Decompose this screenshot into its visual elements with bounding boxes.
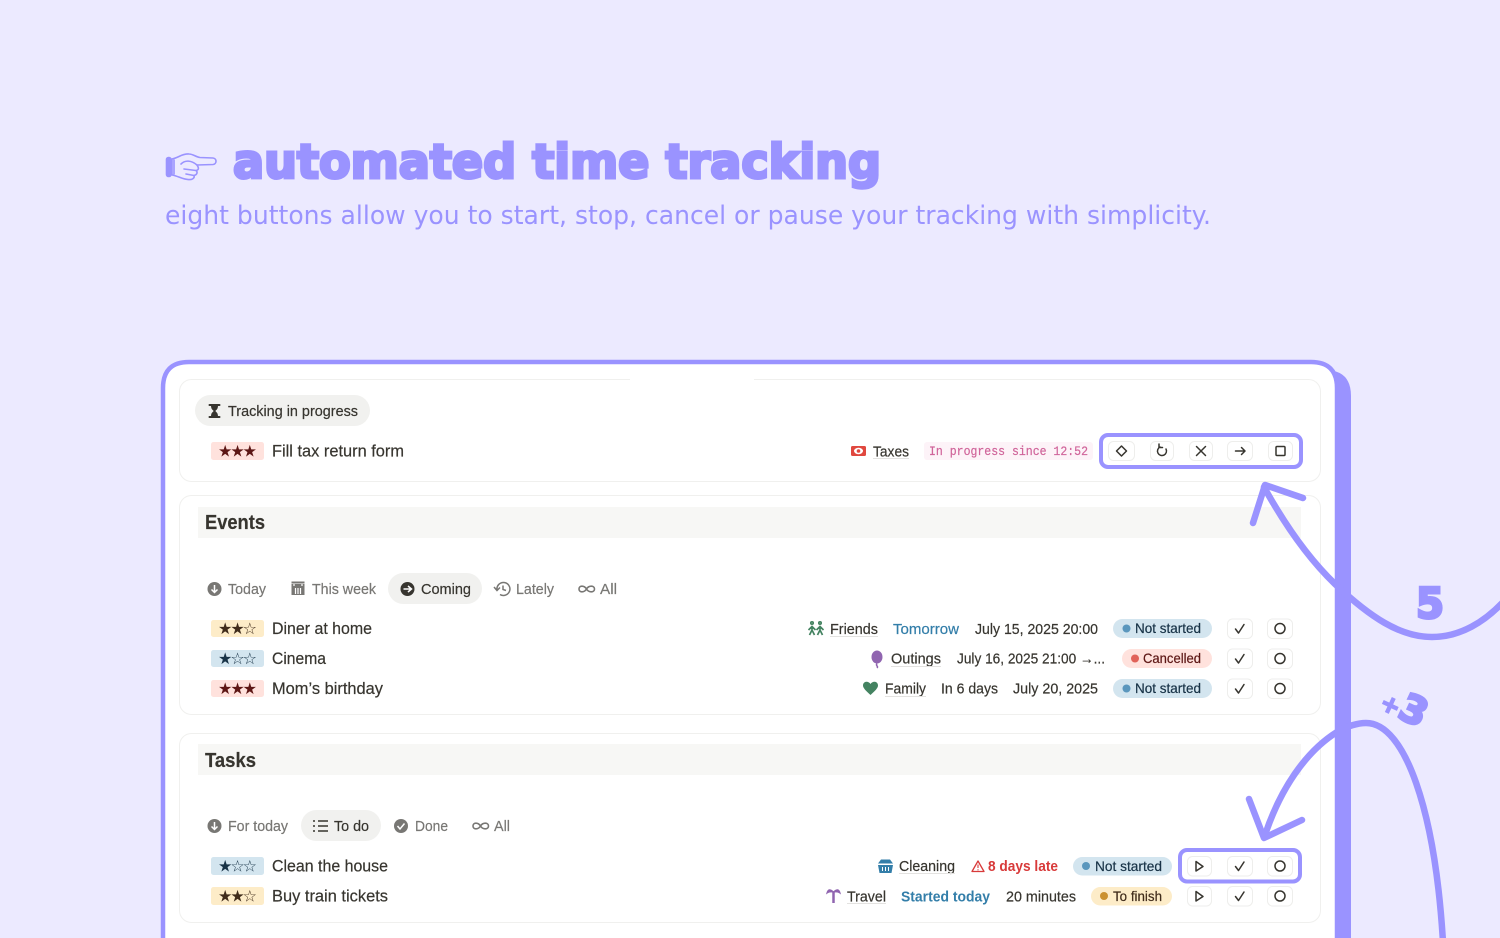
row: buy train tickets: 20 minutes [1006,888,1076,906]
heading: tasks: Tasks [205,750,256,772]
row: clean the house: Clean the house [272,858,388,876]
row: buy train tickets: Buy train tickets [272,888,388,906]
buttons: five tracking actions [1108,442,1292,460]
row: clean the house [211,856,1172,876]
row: fill tax return form: In progress since 12:52 [929,445,1088,459]
tabs: events views: Coming [421,581,471,598]
row: cinema: Cinema [272,650,327,668]
tabs: events views: Lately [516,581,554,598]
tabs: tasks views: To do [334,818,369,835]
row: diner at home: Tomorrow [893,621,959,638]
row: clean the house: Cleaning [899,858,955,875]
panel: events [180,496,1320,714]
tabs: events views: All [600,581,617,598]
row: diner at home: July 15, 2025 20:00 [975,621,1098,638]
tab: tracking in progress [195,395,370,426]
heading: events [198,507,1301,538]
row: mom's birthday: Family [885,680,926,698]
row: diner at home: Friends [830,621,878,638]
row: fill tax return form [211,442,1093,460]
row: buy train tickets [211,886,1172,906]
panel: tasks [180,734,1320,922]
row: mom's birthday: Not started [1135,680,1201,696]
row: fill tax return form: ★★★ [218,442,257,460]
icon: pointing hand [166,154,216,180]
row: cinema: July 16, 2025 21:00 →... [957,650,1105,668]
row: mom's birthday: In 6 days [941,680,998,698]
row: diner at home [211,619,1212,638]
heading: events: Events [205,512,265,534]
tabs: tasks views: Done [415,818,448,835]
row: mom's birthday: ★★★ [218,679,257,698]
row: fill tax return form: Taxes [873,444,909,460]
tabs: tasks views [208,810,510,841]
tabs: events views: Today [228,581,266,598]
row: clean the house: Not started [1095,858,1162,874]
row: clean the house: ★☆☆ [218,856,257,876]
row: buy train tickets: To finish [1113,888,1162,904]
row: mom's birthday: Mom’s birthday [272,680,384,698]
panel: tracking in progress [180,380,1320,482]
heading: tasks [198,744,1301,775]
row: buy train tickets: Started today [901,888,991,906]
tabs: tasks views: For today [228,818,288,835]
row: clean the house: 8 days late [988,858,1058,875]
header [165,135,1211,231]
row: diner at home: ★★☆ [218,619,257,638]
row: fill tax return form: Fill tax return form [272,442,404,460]
title: automated time tracking [233,135,881,190]
label: 5: 5 [1416,579,1444,628]
highlight box: three buttons [1180,850,1300,882]
row: mom's birthday: July 20, 2025 [1013,680,1098,698]
row: diner at home: Diner at home [272,620,372,638]
row: cinema: Cancelled [1143,650,1201,666]
arrow: to five buttons [1253,485,1500,637]
row: cinema [211,649,1212,668]
tabs: tasks views: All [494,818,510,835]
tabs: events views [208,573,617,604]
row: mom's birthday [211,679,1212,698]
row: buy train tickets: Travel [847,888,886,906]
highlight box: five buttons [1101,435,1301,467]
subtitle: eight buttons allow you to start, stop, cancel or pause your tracking with simplicity. [165,201,1211,231]
buttons: tasks play check circle [1188,856,1292,906]
row: diner at home: Not started [1135,620,1201,636]
tabs: events views: This week [312,581,376,598]
row: buy train tickets: ★★☆ [218,886,257,906]
buttons: events check and circle [1228,619,1292,698]
row: cinema: ★☆☆ [218,649,257,668]
label: +3: +3 [1374,676,1435,736]
tab: tracking in progress: Tracking in progress [228,403,358,420]
row: cinema: Outings [891,650,941,668]
arrow: to three buttons [1249,723,1443,938]
app window frame [163,362,1351,938]
